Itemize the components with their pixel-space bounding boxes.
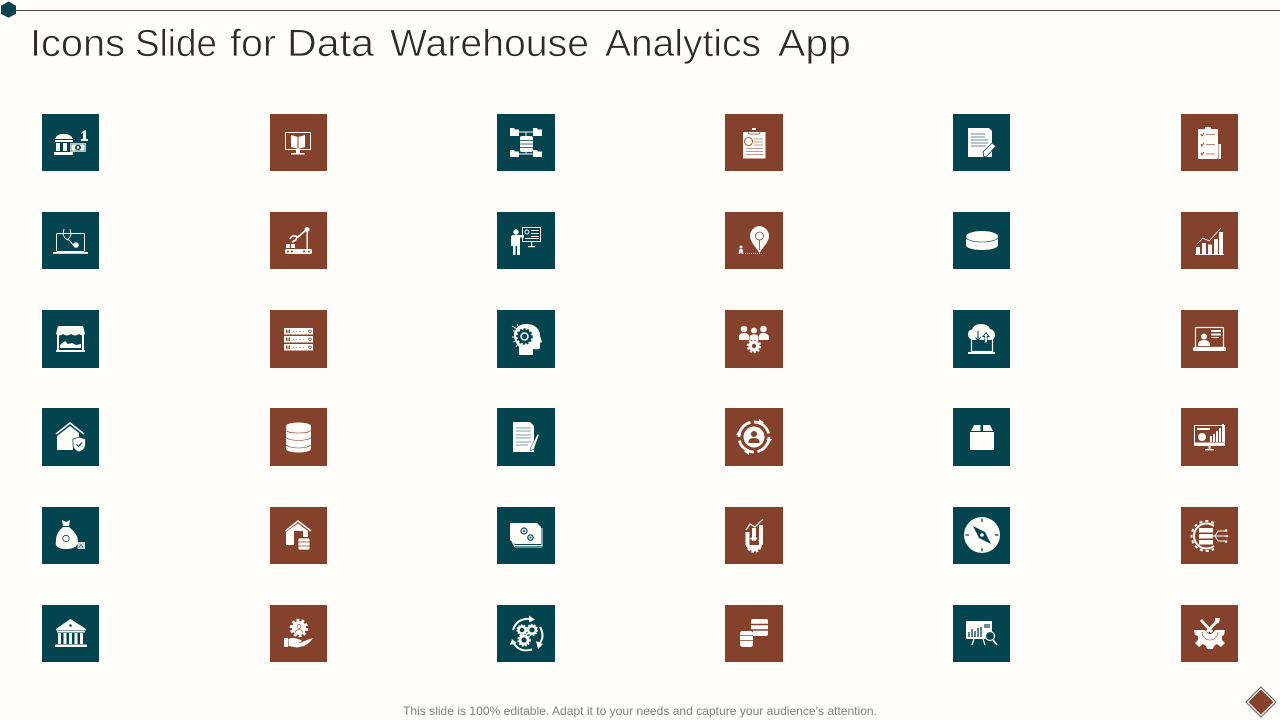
title: Slide <box>135 23 217 65</box>
title <box>30 23 851 65</box>
title: Data <box>287 23 375 65</box>
footer note: This slide is 100% editable. Adapt it to your needs and capture your audience's attention. <box>403 704 877 718</box>
header rule with hexagon <box>1 2 1280 18</box>
tile: location pin <box>725 212 783 269</box>
icon grid <box>42 114 1238 662</box>
tile: money bag <box>42 507 99 564</box>
tile: document with pen <box>497 408 555 466</box>
tile: sheets with gears <box>497 507 555 564</box>
tile: server rack <box>270 310 327 368</box>
tile: storefront <box>42 310 99 368</box>
tile: classical building <box>42 605 99 662</box>
tile: compass <box>953 507 1010 564</box>
tile: database and server <box>725 605 783 662</box>
tile: rotating gears <box>497 605 555 662</box>
title: Warehouse <box>390 23 589 65</box>
tile: presentation chart with magnifier <box>953 605 1010 662</box>
tile: growth bar chart <box>1181 212 1238 269</box>
tile: laptop with stethoscope <box>42 212 99 269</box>
tile: house with shield <box>42 408 99 466</box>
tile: gear with circuit <box>1181 507 1238 564</box>
tile: bank and money <box>42 114 99 171</box>
tile: checklist <box>1181 114 1238 171</box>
corner diamond <box>1246 687 1276 717</box>
tile: box <box>953 408 1010 466</box>
tile: head with gear <box>497 310 555 368</box>
tile: cloud laptop <box>953 310 1010 368</box>
tile: database <box>270 408 327 466</box>
tile: disc <box>953 212 1010 269</box>
tile: database with folders <box>497 114 555 171</box>
tile: presenter with board <box>497 212 555 269</box>
tile: document and pencil <box>953 114 1010 171</box>
title: for <box>230 23 276 65</box>
tile: gear with tools <box>1181 605 1238 662</box>
tile: person in rotating arrows <box>725 408 783 466</box>
tile: laptop with presenter <box>1181 310 1238 368</box>
tile: team with gear <box>725 310 783 368</box>
tile: clipboard report <box>725 114 783 171</box>
title: App <box>778 23 851 65</box>
tile: hand with gear <box>270 605 327 662</box>
tile: monitor with book <box>270 114 327 171</box>
title: Analytics <box>605 23 761 65</box>
tile: house with database <box>270 507 327 564</box>
tile: dashboard monitor <box>1181 408 1238 466</box>
tile: robot arm conveyor <box>270 212 327 269</box>
title: Icons <box>30 23 125 65</box>
tile: chart with gear <box>725 507 783 564</box>
